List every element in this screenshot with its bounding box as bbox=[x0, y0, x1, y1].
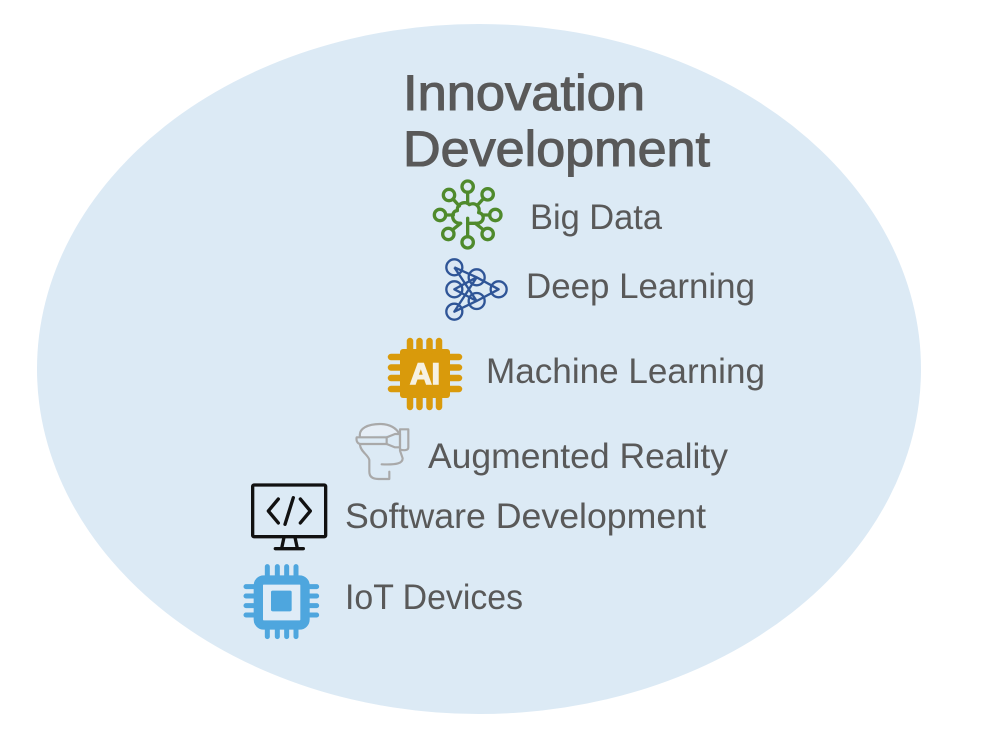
icon: augmented reality headset bbox=[356, 424, 408, 479]
label: big data: Big Data bbox=[530, 198, 663, 237]
label: iot devices: IoT Devices bbox=[345, 578, 523, 617]
title: Development bbox=[403, 121, 710, 177]
icon: AI chip bbox=[391, 341, 459, 407]
icon: software development monitor bbox=[253, 485, 326, 549]
icon: deep learning neural network bbox=[446, 259, 507, 320]
label: software development: Software Development bbox=[345, 497, 706, 536]
title bbox=[403, 65, 710, 177]
icon: big data cloud network bbox=[434, 181, 501, 248]
icon: IoT chip bbox=[246, 567, 317, 637]
label: deep learning: Deep Learning bbox=[526, 267, 755, 306]
icon: AI chip: AI bbox=[410, 358, 440, 391]
label: augmented reality: Augmented Reality bbox=[428, 437, 728, 476]
label: machine learning: Machine Learning bbox=[486, 352, 765, 391]
title: Innovation bbox=[403, 65, 645, 121]
